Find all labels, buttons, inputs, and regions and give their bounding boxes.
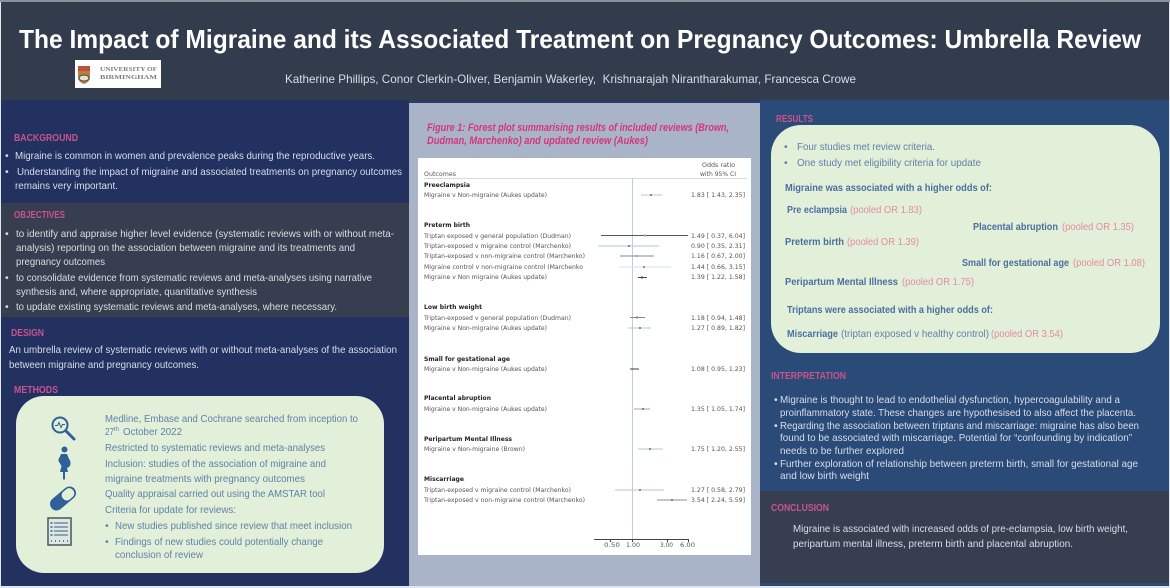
heading: methods: METHODS — [14, 384, 58, 396]
migraine findings: Pre eclampsia — [787, 204, 847, 216]
panel: objectives: analysis) reporting on the association between migraine and its treatments and — [16, 242, 355, 254]
panel: interpretation: proinflammatory state. These changes are hypothesised to also affect the placenta. — [780, 407, 1136, 419]
outcome: preeclampsia: Preeclampsia — [424, 182, 470, 189]
outcome: preterm birth: Migraine control v non-migraine control (Marchenko — [424, 264, 583, 271]
methods text: Findings of new studies could potentially change — [115, 536, 323, 548]
panel: interpretation: Migraine is thought to lead to endothelial dysfunction, hypercoagulability and a — [780, 394, 1120, 406]
triptan findings: (triptan exposed v healthy control) — [841, 328, 989, 340]
plot x axis: 0.50 — [604, 542, 620, 549]
methods text: Inclusion: studies of the association of migraine and — [105, 458, 326, 470]
outcome: miscarriage: 3.54 [ 2.24, 5.59] — [691, 497, 745, 504]
logo: University of Birmingham: UNIVERSITY OF — [100, 66, 157, 73]
methods text: th — [114, 427, 119, 433]
outcome: miscarriage: 1.27 [ 0.58, 2.79] — [691, 487, 745, 494]
panel: background: Migraine is common in women and prevalence peaks during the reproductive years. — [15, 150, 375, 162]
panel: objectives: • — [5, 272, 9, 284]
panel: results — [771, 125, 1160, 353]
panel: objectives: pregnancy outcomes — [16, 256, 105, 268]
outcome: peripartum mental illness: Peripartum Mental Illness — [424, 436, 512, 443]
migraine findings: (pooled OR 1.35) — [1062, 221, 1134, 233]
panel: design — [9, 327, 397, 371]
left column panel — [1, 100, 409, 586]
panel: interpretation: and low birth weight — [780, 470, 869, 482]
migraine findings: Placental abruption — [973, 221, 1058, 233]
triptan findings — [787, 304, 1063, 340]
outcome: placental abruption: Placental abruption — [424, 395, 491, 402]
methods text: Restricted to systematic reviews and meta-analyses — [105, 442, 325, 454]
methods text: • — [105, 520, 109, 532]
migraine findings: Preterm birth — [785, 236, 844, 248]
panel: objectives: • — [5, 228, 9, 240]
right column panel — [760, 100, 1169, 586]
outcome: peripartum mental illness: Migraine v Non-migraine (Brown) — [424, 446, 525, 453]
panel: interpretation: • — [774, 458, 778, 470]
outcome: low birth weight: 1.18 [ 0.94, 1.48] — [691, 315, 745, 322]
results bullets: Four studies met review criteria. — [797, 141, 935, 153]
logo: University of Birmingham: BIRMINGHAM — [100, 74, 157, 81]
panel: interpretation: INTERPRETATION — [771, 370, 846, 382]
panel: design: DESIGN — [11, 327, 44, 339]
outcome: preterm birth: Triptan exposed v general population (Dudman) — [423, 233, 571, 240]
icon: checklist — [48, 518, 71, 545]
outcome: low birth weight — [423, 304, 745, 332]
outcome: preeclampsia: 1.83 [ 1.43, 2.35] — [691, 192, 745, 199]
methods text — [105, 413, 358, 561]
outcome: miscarriage — [423, 476, 745, 504]
outcome: miscarriage: Miscarriage — [424, 476, 464, 483]
header banner — [1, 2, 1169, 100]
panel: objectives: to consolidate evidence from systematic reviews and meta-analyses using narrative — [16, 272, 372, 284]
outcome: preterm birth — [423, 222, 745, 281]
panel: interpretation: • — [774, 394, 778, 406]
panel: background: • — [5, 166, 9, 178]
forest plot — [418, 158, 751, 555]
panel: conclusion: CONCLUSION — [771, 502, 829, 514]
outcome: miscarriage: Triptan-exposed v non-migraine control (Marchenko) — [423, 497, 585, 504]
plot header — [424, 162, 736, 178]
plot x axis: 3.00 — [660, 542, 673, 549]
panel: objectives — [1, 203, 409, 317]
outcome: low birth weight: Migraine v Non-migraine (Aukes update) — [424, 325, 547, 332]
panel: conclusion: Migraine is associated with increased odds of pre-eclampsia, low birth weight, — [793, 523, 1128, 535]
outcome: placental abruption: Migraine v Non-migraine (Aukes update) — [424, 406, 547, 413]
icon: magnifier with pulse — [52, 418, 74, 439]
outcome: low birth weight: Low birth weight — [424, 304, 482, 311]
panel: background: BACKGROUND — [14, 132, 78, 144]
triptan findings: (pooled OR 3.54) — [991, 328, 1063, 340]
methods text: Criteria for update for reviews: — [105, 504, 236, 516]
outcome: peripartum mental illness — [424, 436, 745, 453]
panel: objectives: synthesis and, where appropriate, quantitative synthesis — [16, 286, 257, 298]
plot header: Outcomes — [424, 171, 456, 178]
authors: Katherine Phillips, Conor Clerkin-Oliver, Benjamin Wakerley, Krishnarajah Nirantharakumar, Francesca Crowe — [285, 72, 856, 86]
triptan findings: Triptans were associated with a higher odds of: — [787, 304, 993, 316]
outcome: preterm birth: 1.16 [ 0.67, 2.00] — [691, 253, 745, 260]
figure caption — [427, 122, 729, 147]
outcome: preterm birth: Preterm birth — [424, 222, 470, 229]
migraine findings: Migraine was associated with a higher odds of: — [785, 182, 992, 194]
outcome: small for gestational age: Migraine v Non-migraine (Aukes update) — [424, 366, 547, 373]
panel: interpretation: Regarding the association between triptans and miscarriage: migraine has also been — [780, 420, 1139, 432]
outcome: peripartum mental illness: 1.75 [ 1.20, 2.55] — [691, 446, 745, 453]
methods text: Medline, Embase and Cochrane searched from inception to — [105, 413, 358, 425]
panel: background: Understanding the impact of migraine and associated treatments on pregnancy outcomes — [17, 166, 402, 178]
panel: interpretation: needs to be further explored — [780, 445, 904, 457]
results bullets: • — [784, 141, 788, 153]
panel: objectives: OBJECTIVES — [14, 209, 65, 221]
migraine findings: (pooled OR 1.39) — [847, 236, 919, 248]
plot header: Odds ratio — [702, 162, 735, 169]
outcome: small for gestational age: Small for gestational age — [424, 356, 510, 363]
outcome: preeclampsia — [424, 182, 745, 199]
methods text: October 2022 — [123, 426, 182, 438]
panel: design: An umbrella review of systematic reviews with or without meta-analyses of the association — [9, 344, 397, 356]
migraine findings: (pooled OR 1.75) — [902, 276, 974, 288]
panel: methods — [16, 396, 384, 573]
migraine findings: Peripartum Mental Illness — [785, 276, 898, 288]
panel: interpretation: found to be associated with miscarriage. Potential for “confounding by indication” — [780, 432, 1132, 444]
migraine findings: Small for gestational age — [962, 257, 1069, 269]
results bullets — [784, 141, 981, 169]
plot x axis: 1.00 — [626, 542, 640, 549]
migraine findings: (pooled OR 1.08) — [1073, 257, 1145, 269]
panel: interpretation: • — [774, 420, 778, 432]
outcome: small for gestational age: 1.08 [ 0.95, 1.23] — [691, 366, 745, 373]
outcome: small for gestational age — [424, 356, 745, 373]
panel: conclusion: peripartum mental illness, preterm birth and placental abruption. — [793, 538, 1073, 550]
panel: objectives: to update existing systematic reviews and meta-analyses, where necessary. — [16, 301, 337, 313]
panel: conclusion — [760, 491, 1169, 583]
methods text: Quality appraisal carried out using the AMSTAR tool — [105, 488, 325, 500]
methods text: 27 — [105, 426, 114, 438]
results bullets: One study met eligibility criteria for update — [797, 157, 981, 169]
outcome: preterm birth: Triptan-exposed v non-migraine control (Marchenko) — [423, 253, 585, 260]
panel: objectives: to identify and appraise higher level evidence (systematic reviews with or without meta- — [16, 228, 394, 240]
outcome: low birth weight: Triptan-exposed v general population (Dudman) — [423, 315, 571, 322]
figure caption: Dudman, Marchenko) and updated review (Aukes) — [427, 135, 648, 147]
results bullets: • — [784, 157, 788, 169]
plot header: with 95% CI — [700, 171, 736, 178]
outcome: preterm birth: 0.90 [ 0.35, 2.31] — [691, 243, 745, 250]
outcome: preterm birth: Triptan-exposed v migraine control (Marchenko) — [423, 243, 571, 250]
outcome: preterm birth: Migraine v Non migraine (Aukes update) — [424, 274, 547, 281]
middle column panel — [409, 100, 760, 586]
panel: interpretation — [771, 370, 1139, 482]
icon: pill capsule — [47, 484, 79, 513]
panel: design: between migraine and pregnancy outcomes. — [9, 359, 199, 371]
methods text: • — [105, 536, 109, 548]
figure caption: Figure 1: Forest plot summarising results of included reviews (Brown, — [427, 122, 729, 134]
outcome: low birth weight: 1.27 [ 0.89, 1.82] — [691, 325, 745, 332]
panel: background: • — [5, 150, 9, 162]
methods text: New studies published since review that meet inclusion — [115, 520, 352, 532]
plot x axis — [594, 539, 695, 549]
outcome: placental abruption: 1.35 [ 1.05, 1.74] — [691, 406, 745, 413]
migraine findings: (pooled OR 1.83) — [850, 204, 922, 216]
outcome: preterm birth: 1.44 [ 0.66, 3.15] — [691, 264, 745, 271]
outcome: placental abruption — [424, 395, 745, 413]
outcome: miscarriage: Triptan-exposed v migraine control (Marchenko) — [423, 487, 571, 494]
icon: pregnant woman — [58, 446, 70, 480]
methods text: migraine treatments with pregnancy outcomes — [105, 473, 305, 485]
panel: background: remains very important. — [15, 180, 118, 192]
outcome: preterm birth: 1.39 [ 1.22, 1.58] — [691, 274, 745, 281]
migraine findings — [785, 182, 1145, 288]
outcome: preeclampsia: Migraine v Non-migraine (Aukes update) — [424, 192, 547, 199]
logo: University of Birmingham — [75, 60, 161, 88]
methods text: conclusion of review — [115, 549, 203, 561]
panel: objectives: • — [5, 301, 9, 313]
triptan findings: Miscarriage — [787, 328, 838, 340]
panel: interpretation: Further exploration of relationship between preterm birth, small for gestational age — [780, 458, 1138, 470]
panel: background — [5, 132, 402, 192]
plot x axis: 6.00 — [680, 542, 695, 549]
heading: results: RESULTS — [776, 113, 813, 125]
outcome: preterm birth: 1.49 [ 0.37, 6.04] — [691, 233, 745, 240]
